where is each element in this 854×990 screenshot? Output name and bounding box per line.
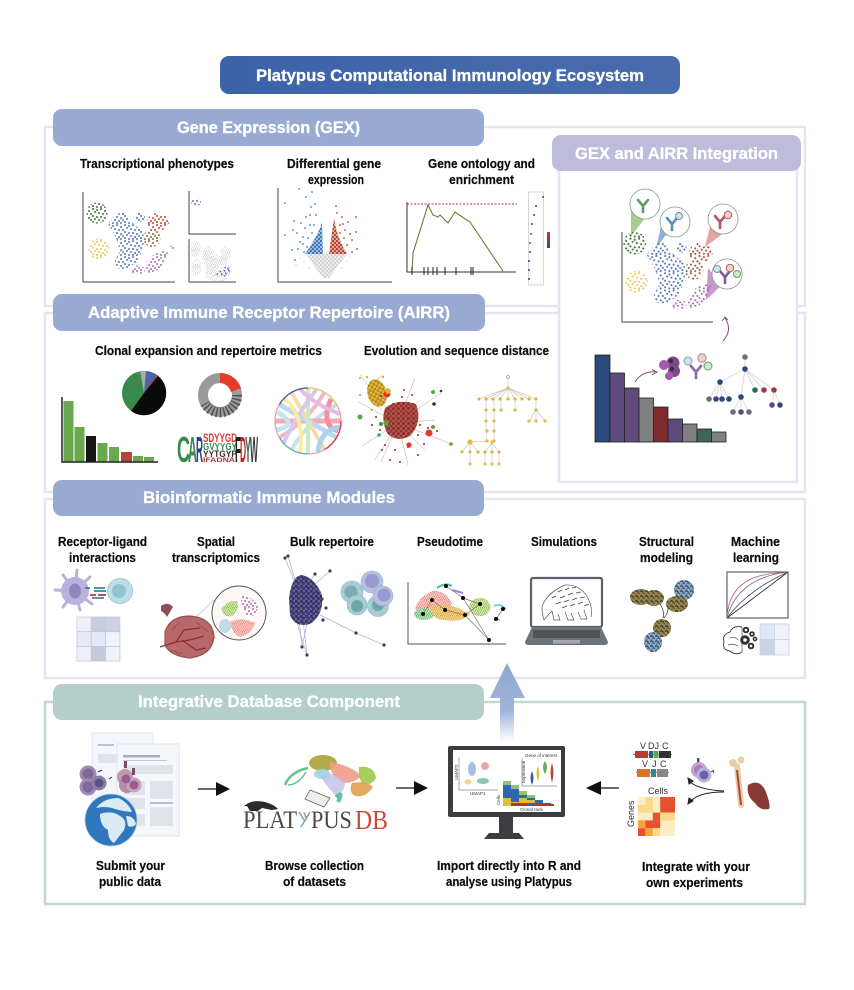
label: differential gene expression: expression xyxy=(308,173,364,187)
chart: enrichment plot xyxy=(407,202,517,275)
label: spatial transcriptomics xyxy=(172,535,260,565)
label: transcriptional phenotypes: Transcriptional phenotypes xyxy=(80,157,234,171)
icon: cell cluster xyxy=(341,571,393,616)
arrow: bars to cell xyxy=(635,370,657,382)
arrows: sources to cells and heatmap xyxy=(688,778,724,804)
icon: monitor with plots: Gene of interest xyxy=(525,753,558,758)
icon: monitor with plots: Clonal rank xyxy=(520,807,544,812)
chart: sequence logo: Y xyxy=(245,429,251,470)
heading: integrative database component xyxy=(53,684,484,720)
icon: VDJ gene segments: C xyxy=(660,759,667,769)
icon: immune cells xyxy=(691,758,714,782)
chart: sequence logo: A xyxy=(188,429,197,470)
icon: VDJ gene segments: V xyxy=(640,741,646,751)
panel: bioinformatic modules frame xyxy=(45,499,805,678)
chart: UMAP mini bottom xyxy=(189,239,236,282)
label: submit your public data: public data xyxy=(99,875,162,889)
panel: GEX and AIRR integration xyxy=(552,135,801,482)
label: browse collection of datasets xyxy=(265,859,364,889)
icon: receptor-ligand cells xyxy=(55,570,132,610)
label: browse collection of datasets: Browse collection xyxy=(265,859,364,873)
arrow: integrate to import xyxy=(586,781,619,795)
chart: PlatypusDB UMAP xyxy=(285,755,376,807)
label: import directly xyxy=(437,859,581,889)
label: spatial transcriptomics: transcriptomics xyxy=(172,551,260,565)
arrow: submit to browse xyxy=(198,782,230,796)
icon: documents, cells and globe xyxy=(80,733,179,846)
heading: Gene Expression: Gene Expression (GEX) xyxy=(177,118,360,137)
text: W xyxy=(250,429,258,470)
label: structural modeling: modeling xyxy=(640,551,693,565)
icon: monitor with plots: Cells xyxy=(496,794,501,805)
chart: sequence logo: YYTGYP xyxy=(203,449,237,459)
label: structural modeling xyxy=(639,535,694,565)
chart: bulk repertoire network xyxy=(285,556,384,655)
heading: GEX and AIRR Integration: GEX and AIRR Integration xyxy=(575,144,778,163)
label: machine learning: learning xyxy=(733,551,779,565)
icon: spleen xyxy=(748,783,770,809)
icon: monitor with plots: UMAP1 xyxy=(470,791,486,796)
label: receptor-ligand: Receptor-ligand xyxy=(58,535,147,549)
chart: phylogenetic tree xyxy=(706,354,783,415)
chart: cell-gene heatmap: Cells xyxy=(648,786,669,796)
label: simulations: Simulations xyxy=(531,535,597,549)
icon: laptop with hedgehog xyxy=(525,578,608,645)
label: submit your public data: Submit your xyxy=(96,859,165,873)
chart: sequence logo: D xyxy=(240,429,246,470)
icon: interaction grid xyxy=(77,617,120,661)
chart: UMAP mini top xyxy=(189,191,236,282)
title xyxy=(220,56,680,94)
icon: VDJ gene segments: J xyxy=(652,759,656,769)
heading: integrative database component: Integrative Database Component xyxy=(138,692,400,711)
chart: donut xyxy=(203,373,241,413)
chart: sequence logo: R xyxy=(196,429,203,470)
heading: GEX and AIRR Integration xyxy=(552,135,801,171)
chart: volcano plot xyxy=(278,188,392,282)
chart: sequence logo: C xyxy=(177,429,190,470)
icon: monitor with plots: Expression xyxy=(521,760,526,783)
label: spatial transcriptomics: Spatial xyxy=(197,535,235,549)
icon: monitor with plots: UMAP2 xyxy=(454,764,459,780)
chart: sequence network xyxy=(358,375,453,465)
panel: GEX frame xyxy=(45,127,805,306)
icon: VDJ gene segments: C xyxy=(662,741,669,751)
label: integrate with your own experiments: own experiments xyxy=(646,876,743,890)
label: differential gene expression xyxy=(287,157,381,187)
chart: enrichment rank strip xyxy=(528,192,550,285)
chart: sequence logo: GVYYGY xyxy=(203,442,237,453)
icon: brain and gears xyxy=(724,627,757,654)
label: evolution and sequence distance: Evolution and sequence distance xyxy=(364,344,549,358)
arrow: browse to import xyxy=(396,781,428,795)
icon: VDJ gene segments xyxy=(633,741,672,777)
label: integrate with your own experiments: Integrate with your xyxy=(642,860,750,874)
chart: sequence logo: F xyxy=(235,429,241,470)
chart: cell-gene heatmap: Genes xyxy=(626,800,636,827)
icon: antibody structure xyxy=(630,580,694,652)
label: bulk repertoire: Bulk repertoire xyxy=(290,535,374,549)
label: integrate with your own experiments xyxy=(642,860,750,890)
chart: pseudotime trajectory xyxy=(408,582,506,644)
chart: sequence logo xyxy=(177,429,258,470)
icon: infected cells xyxy=(659,356,680,380)
arrow: database to modules xyxy=(490,663,525,742)
chart: lineage tree xyxy=(462,376,545,464)
chart: UMAP main scatter xyxy=(83,192,176,282)
heading: AIRR: Adaptive Immune Receptor Repertoire (AIRR) xyxy=(88,303,450,322)
icon: VDJ gene segments: DJ xyxy=(648,741,659,751)
heading: Gene Expression xyxy=(53,109,484,146)
icon: VDJ gene segments: V xyxy=(642,759,648,769)
heading: AIRR xyxy=(53,294,485,331)
icon: femur bone xyxy=(729,756,744,805)
chart: sequence logo: SDYYGD xyxy=(203,431,237,445)
logo: PlatypusDB: PUS xyxy=(311,807,352,834)
arrow: bar chart to UMAP xyxy=(722,317,729,341)
label: import directly: Import directly into R and xyxy=(437,859,581,873)
panel: AIRR frame xyxy=(45,313,805,492)
label: structural modeling: Structural xyxy=(639,535,694,549)
label: machine learning: Machine xyxy=(731,535,780,549)
label: receptor-ligand: interactions xyxy=(69,551,136,565)
icon: monitor with plots xyxy=(448,746,565,839)
chart: clonal expansion bars xyxy=(595,355,726,442)
label: differential gene expression: Differential gene xyxy=(287,157,381,171)
label: receptor-ligand xyxy=(58,535,147,565)
logo: PlatypusDB xyxy=(243,801,388,835)
label: gene ontology and enrichment xyxy=(428,157,535,187)
chart: ROC curves xyxy=(727,572,788,618)
chart: integrated UMAP with receptor callouts xyxy=(622,189,742,322)
icon: spleen with spatial inset xyxy=(160,586,266,658)
label: gene ontology and enrichment: enrichment xyxy=(449,173,515,187)
logo: PlatypusDB: PLAT xyxy=(243,807,297,834)
chart: chord diagram xyxy=(275,388,341,454)
icon: ML confusion grid xyxy=(760,624,789,655)
label: pseudotime: Pseudotime xyxy=(417,535,483,549)
panel: integrative database frame xyxy=(45,702,805,904)
label: browse collection of datasets: of datasets xyxy=(283,875,346,889)
icon: antibody with antigens xyxy=(684,354,712,378)
label: submit your public data xyxy=(96,859,165,889)
chart: cell-gene heatmap xyxy=(626,786,675,836)
heading: bioinformatic immune modules xyxy=(53,480,484,516)
label: clonal expansion: Clonal expansion and repertoire metrics xyxy=(95,344,322,358)
label: import directly: analyse using Platypus xyxy=(446,875,572,889)
chart: clonal bar chart xyxy=(62,397,158,462)
title: Platypus Computational Immunology Ecosystem xyxy=(256,66,644,85)
logo: PlatypusDB: DB xyxy=(355,805,388,835)
label: machine learning xyxy=(731,535,780,565)
chart: sequence logo: IFADNA xyxy=(203,458,236,464)
heading: bioinformatic immune modules: Bioinformatic Immune Modules xyxy=(143,488,395,507)
chart: pie xyxy=(122,371,166,415)
label: gene ontology and enrichment: Gene ontology and xyxy=(428,157,535,171)
